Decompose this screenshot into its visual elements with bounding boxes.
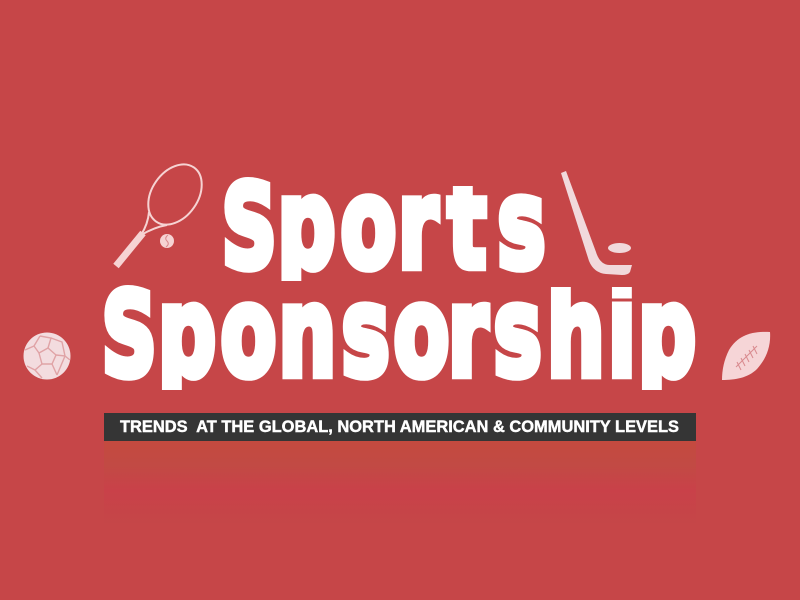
icon: hockey stick <box>561 171 632 275</box>
icon: soccer ball <box>24 332 70 380</box>
title line: Sports <box>224 177 545 281</box>
subtitle bar <box>104 413 696 441</box>
icon: tennis racket <box>116 154 213 266</box>
title <box>104 177 696 390</box>
title line: Sponsorship: S <box>102 269 157 403</box>
title line: Sports: ports <box>278 154 546 297</box>
faded band below subtitle <box>104 441 696 523</box>
title line: Sports: S <box>222 161 277 295</box>
title line: Sponsorship: ponsorship <box>158 262 696 405</box>
icon: tennis ball <box>160 234 174 248</box>
icon: hockey puck <box>608 243 631 253</box>
title line: Sponsorship <box>104 285 696 390</box>
subtitle text: TRENDS AT THE GLOBAL, NORTH AMERICAN & COMMUNITY LEVELS <box>120 418 679 436</box>
icon: american football <box>722 332 770 380</box>
